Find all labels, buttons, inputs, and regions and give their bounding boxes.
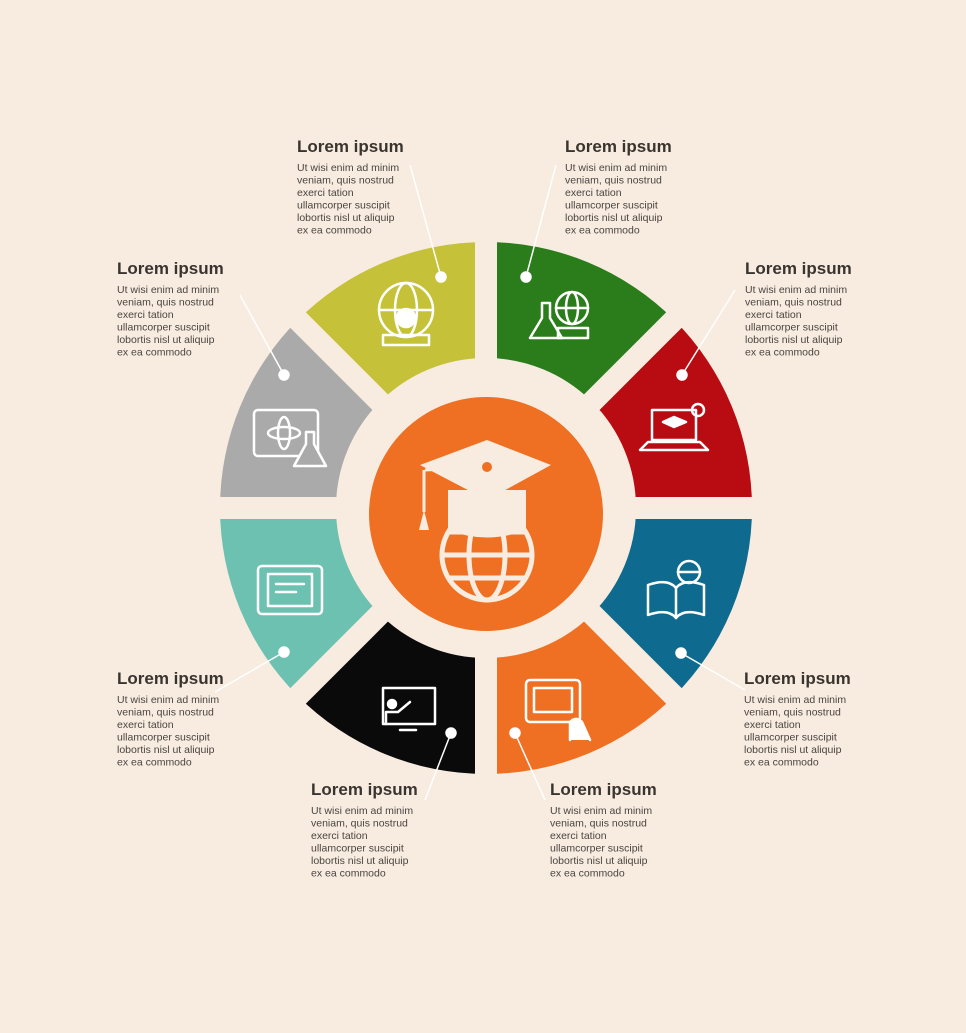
text block: top left: lobortis nisl ut aliquip [297, 212, 395, 224]
text block: bottom left: veniam, quis nostrud [311, 818, 408, 830]
icon: tablet atom flask [254, 410, 326, 466]
text block: bottom left: ullamcorper suscipit [311, 842, 404, 854]
text block: bottom left: Lorem ipsum [311, 780, 418, 799]
text block: top left: Lorem ipsum [297, 137, 404, 156]
text block: left lower: lobortis nisl ut aliquip [117, 744, 215, 756]
center circle [369, 397, 603, 631]
text block: bottom right: Lorem ipsum [550, 780, 657, 799]
text block: top right: ullamcorper suscipit [565, 200, 658, 212]
icon: book and globe [648, 561, 704, 618]
text block: bottom right: exerci tation [550, 830, 607, 842]
text block: bottom right: ex ea commodo [550, 868, 625, 880]
text block: bottom left: Ut wisi enim ad minim [311, 805, 413, 817]
segment: green [486, 242, 674, 402]
text block: right lower: Ut wisi enim ad minim [744, 694, 846, 706]
text block: left lower: exerci tation [117, 719, 174, 731]
text block: right lower: veniam, quis nostrud [744, 706, 841, 718]
text block: top right: veniam, quis nostrud [565, 174, 662, 186]
icon: flask and globe [530, 292, 588, 338]
text block: right upper: Lorem ipsum [745, 259, 852, 278]
text block: right upper: exerci tation [745, 309, 802, 321]
icon: teacher at board [383, 688, 435, 730]
text block: top left: exerci tation [297, 187, 354, 199]
text block: right lower: lobortis nisl ut aliquip [744, 744, 842, 756]
text block: bottom left: lobortis nisl ut aliquip [311, 855, 409, 867]
text block: top right: ex ea commodo [565, 224, 640, 236]
segment: orange [486, 614, 674, 774]
text block: top right: lobortis nisl ut aliquip [565, 212, 663, 224]
text block: right upper [745, 259, 852, 358]
text block: left upper: ullamcorper suscipit [117, 322, 210, 334]
text block: right upper: ullamcorper suscipit [745, 322, 838, 334]
text block: right upper: lobortis nisl ut aliquip [745, 334, 843, 346]
text block: left upper [117, 259, 224, 358]
text block: left upper: lobortis nisl ut aliquip [117, 334, 215, 346]
text block: top right [565, 137, 672, 236]
text block: left upper: Lorem ipsum [117, 259, 224, 278]
text block: bottom right: Ut wisi enim ad minim [550, 805, 652, 817]
segment: gray [220, 320, 380, 508]
text block: left lower [117, 669, 224, 768]
icon: globe apple book [379, 283, 433, 345]
text block: left upper: veniam, quis nostrud [117, 296, 214, 308]
text block: left lower: ullamcorper suscipit [117, 732, 210, 744]
text block: top right: Lorem ipsum [565, 137, 672, 156]
text block: right upper: Ut wisi enim ad minim [745, 284, 847, 296]
text block: right lower [744, 669, 851, 768]
icon: tablet hand [526, 680, 590, 740]
segment: teal [220, 508, 380, 696]
text block: bottom right: veniam, quis nostrud [550, 818, 647, 830]
text block: right lower: Lorem ipsum [744, 669, 851, 688]
text block: left upper: ex ea commodo [117, 346, 192, 358]
icon: tablet certificate [258, 566, 322, 614]
text block: top left: ex ea commodo [297, 224, 372, 236]
text block: bottom right: ullamcorper suscipit [550, 842, 643, 854]
icon: graduation cap and globe [419, 440, 551, 600]
text block: left upper: Ut wisi enim ad minim [117, 284, 219, 296]
text block: right lower: ullamcorper suscipit [744, 732, 837, 744]
text block: left lower: Ut wisi enim ad minim [117, 694, 219, 706]
text block: right upper: ex ea commodo [745, 346, 820, 358]
text block: left lower: Lorem ipsum [117, 669, 224, 688]
text block: bottom left: exerci tation [311, 830, 368, 842]
segment: blue [592, 508, 752, 696]
text block: bottom left [311, 780, 418, 880]
text block: top left: veniam, quis nostrud [297, 174, 394, 186]
ring segments [220, 242, 752, 774]
text block: left lower: veniam, quis nostrud [117, 706, 214, 718]
text block: right upper: veniam, quis nostrud [745, 296, 842, 308]
text block: bottom right: lobortis nisl ut aliquip [550, 855, 648, 867]
segment: yellow [298, 242, 486, 402]
text block: bottom right [550, 780, 657, 880]
text block: top left [297, 137, 404, 236]
text block: right lower: ex ea commodo [744, 756, 819, 768]
text block: top left: ullamcorper suscipit [297, 200, 390, 212]
text block: top right: Ut wisi enim ad minim [565, 162, 667, 174]
text block: left upper: exerci tation [117, 309, 174, 321]
segment: black [298, 614, 486, 774]
text block: left lower: ex ea commodo [117, 756, 192, 768]
segment: red [592, 320, 752, 508]
text block: right lower: exerci tation [744, 719, 801, 731]
text block: bottom left: ex ea commodo [311, 868, 386, 880]
icon: laptop with cap [640, 404, 708, 450]
text block: top left: Ut wisi enim ad minim [297, 162, 399, 174]
text block: top right: exerci tation [565, 187, 622, 199]
connectors [215, 165, 745, 800]
